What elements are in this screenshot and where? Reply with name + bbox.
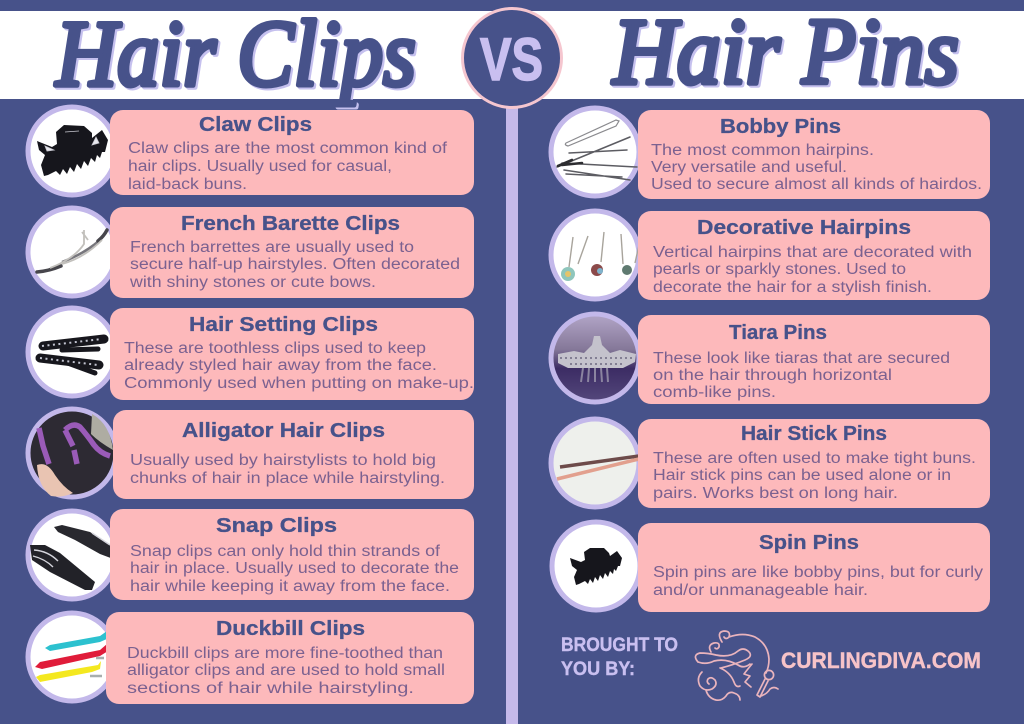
panel: Spin Pins: Spin Pins bbox=[759, 532, 859, 554]
panel: Hair Stick Pins bbox=[551, 419, 990, 508]
panel: Decorative Hairpins bbox=[551, 211, 990, 300]
panel: Claw Clips: Claw Clips bbox=[199, 114, 312, 136]
description: secure half-up hairstyles. Often decorated bbox=[130, 256, 460, 273]
description: Hair stick pins can be used alone or in bbox=[653, 467, 951, 484]
description: hair while keeping it away from the face. bbox=[130, 578, 450, 595]
description: chunks of hair in place while hairstyling. bbox=[130, 470, 445, 487]
description: on the hair through horizontal bbox=[653, 367, 892, 384]
description bbox=[130, 452, 445, 487]
title: Hair Clips: Hair Clips bbox=[56, 4, 418, 108]
image: snap clips bbox=[28, 511, 116, 599]
description: and/or unmanageable hair. bbox=[653, 582, 868, 599]
card bbox=[113, 410, 474, 499]
card bbox=[110, 509, 474, 600]
image: spin pin bbox=[552, 522, 640, 610]
description: These are often used to make tight buns. bbox=[653, 450, 976, 467]
image: decorative hairpins bbox=[551, 211, 639, 299]
description: These look like tiaras that are secured bbox=[653, 350, 950, 367]
panel: French Barette Clips bbox=[28, 207, 474, 298]
description bbox=[129, 239, 460, 291]
card bbox=[106, 612, 474, 704]
description: Usually used by hairstylists to hold big bbox=[130, 452, 436, 469]
header band bbox=[0, 11, 1024, 99]
description bbox=[653, 244, 972, 296]
icon: curling diva logo bbox=[695, 631, 778, 700]
description: hair clips. Usually used for casual, bbox=[128, 158, 392, 175]
panel: French Barette Clips: French Barette Clips bbox=[181, 213, 400, 235]
card bbox=[638, 110, 990, 199]
panel: Duckbill Clips bbox=[28, 612, 474, 704]
description: Spin pins are like bobby pins, but for curly bbox=[653, 564, 983, 581]
description: with shiny stones or cute bows. bbox=[129, 274, 376, 291]
card bbox=[110, 207, 474, 298]
title: Hair Pins: Hair Pins bbox=[611, 0, 959, 104]
site name: CURLINGDIVA.COM bbox=[781, 648, 981, 673]
description: These are toothless clips used to keep bbox=[124, 340, 426, 357]
image: french barette bbox=[28, 208, 116, 296]
description: The most common hairpins. bbox=[651, 142, 874, 159]
credit: brought to you by: YOU BY: bbox=[561, 659, 635, 680]
description: Very versatile and useful. bbox=[651, 159, 847, 176]
card bbox=[638, 523, 990, 612]
description: Snap clips can only hold thin strands of bbox=[130, 543, 441, 560]
description bbox=[127, 645, 445, 697]
panel: Spin Pins bbox=[552, 522, 990, 612]
description: alligator clips and are used to hold small bbox=[127, 662, 445, 679]
panel: Tiara Pins: Tiara Pins bbox=[729, 322, 827, 344]
panel: Bobby Pins: Bobby Pins bbox=[720, 116, 841, 138]
description: Claw clips are the most common kind of bbox=[128, 140, 448, 157]
description: hair in place. Usually used to decorate the bbox=[130, 560, 459, 577]
panel: Tiara Pins bbox=[551, 314, 990, 404]
description: Duckbill clips are more fine-toothed than bbox=[127, 645, 443, 662]
description: comb-like pins. bbox=[653, 384, 776, 401]
credit: brought to you by: BROUGHT TO bbox=[561, 635, 678, 656]
title: Hair Pins: Hair Pins bbox=[613, 2, 961, 106]
title: Hair Clips: Hair Clips bbox=[54, 2, 416, 106]
panel: Claw Clips bbox=[28, 107, 474, 195]
description bbox=[653, 350, 950, 401]
description bbox=[124, 340, 474, 392]
description: Commonly used when putting on make-up. bbox=[124, 375, 474, 392]
image: hair sticks bbox=[551, 419, 639, 507]
card bbox=[638, 315, 990, 404]
description: sections of hair while hairstyling. bbox=[127, 680, 414, 697]
card bbox=[638, 211, 990, 300]
description: decorate the hair for a stylish finish. bbox=[653, 279, 932, 296]
description bbox=[653, 564, 983, 599]
panel: Snap Clips bbox=[28, 509, 474, 600]
panel: Decorative Hairpins: Decorative Hairpins bbox=[697, 217, 911, 239]
panel: Hair Setting Clips bbox=[28, 308, 474, 400]
panel: Bobby Pins bbox=[551, 108, 990, 199]
image: tiara bbox=[551, 314, 639, 402]
description: Vertical hairpins that are decorated with bbox=[653, 244, 972, 261]
panel: Alligator Hair Clips: Alligator Hair Clips bbox=[182, 420, 385, 442]
panel: Alligator Hair Clips bbox=[28, 409, 474, 499]
description: already styled hair away from the face. bbox=[124, 357, 437, 374]
panel: Hair Stick Pins: Hair Stick Pins bbox=[741, 423, 887, 445]
description: Used to secure almost all kinds of hairdos. bbox=[651, 176, 982, 193]
image: setting clips bbox=[28, 308, 116, 396]
panel: Hair Setting Clips: Hair Setting Clips bbox=[189, 314, 378, 336]
VS badge bbox=[462, 8, 562, 108]
description bbox=[651, 142, 982, 193]
VS badge: VS bbox=[480, 26, 543, 93]
image: alligator clips in hair bbox=[28, 409, 116, 497]
description: laid-back buns. bbox=[128, 176, 247, 193]
image: bobby pins bbox=[551, 108, 639, 196]
panel: Duckbill Clips: Duckbill Clips bbox=[216, 618, 365, 640]
description: pearls or sparkly stones. Used to bbox=[653, 261, 906, 278]
image: duckbill clips bbox=[28, 613, 116, 701]
description bbox=[130, 543, 459, 595]
card bbox=[110, 110, 474, 195]
panel: Snap Clips: Snap Clips bbox=[216, 515, 337, 537]
description: French barrettes are usually used to bbox=[130, 239, 414, 256]
description bbox=[653, 450, 976, 502]
credit: brought to you by bbox=[561, 635, 678, 680]
card bbox=[638, 419, 990, 508]
description bbox=[128, 140, 448, 193]
description: pairs. Works best on long hair. bbox=[653, 485, 898, 502]
card bbox=[110, 308, 474, 400]
image: claw clip bbox=[28, 107, 116, 195]
